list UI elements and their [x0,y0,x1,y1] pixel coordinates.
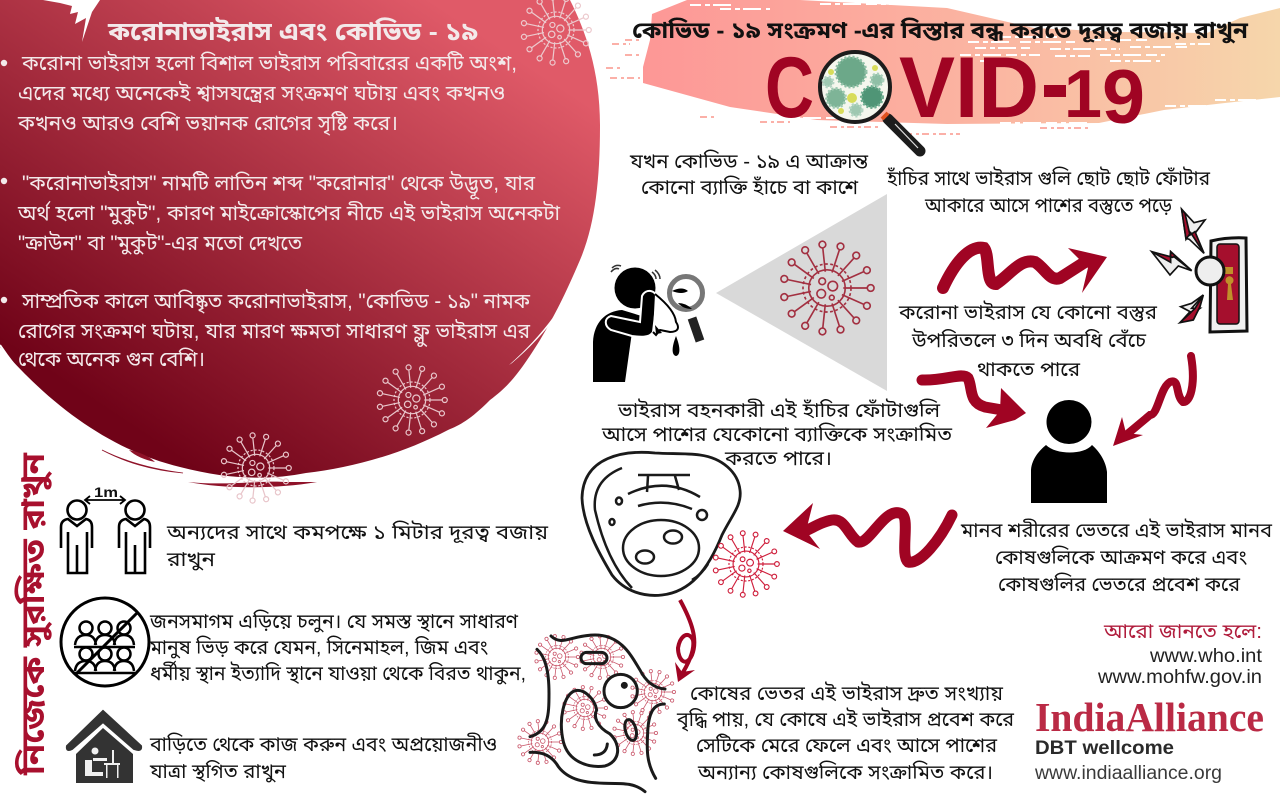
text: virus multiplies in cell: সেটিকে মেরে ফেলে এবং আসে পাশের [696,733,998,757]
icon: magnifier with green viruses [820,52,920,151]
icon: pale virus bottom [221,433,291,503]
title: COVID-19: 9 [1102,55,1145,140]
arrow: cell to damaged cell [675,600,695,682]
logo: India Alliance: IndiaAlliance [1035,694,1264,740]
text: when infected person sneezes: কোনো ব্যাক্তি হাঁচে বা কাশে [641,175,858,199]
bullet list: what coronavirus is [1,51,560,371]
icon: door handle and lightning [1152,209,1247,332]
text: keep 1 metre distance: রাখুন [166,549,216,571]
text: avoid crowds: মানুষ ভিড় করে যেমন, সিনেমাহল, জিম এবং [149,635,488,659]
title: COVID-19 [765,40,1145,140]
text: virus multiplies in cell: বৃদ্ধি পায়, যে কোষে এই ভাইরাস প্রবেশ করে [676,707,1015,732]
heading: maintain distance: কোভিড - ১৯ সংক্রমণ -এর বিস্তার বন্ধ করতে দূরত্ব বজায় রাখুন [632,16,1249,44]
icon: two people 1 metre apart [61,484,150,573]
text: avoid crowds: জনসমাগম এড়িয়ে চলুন। যে সমস্ত স্থানে সাধারণ [149,609,519,633]
text: virus multiplies in cell: অন্যান্য কোষগুলিকে সংক্রামিত করে। [697,760,993,784]
bullet list: what coronavirus is: অর্থ হলো "মুকুট", কারণ মাইক্রোস্কোপের নীচে এই ভাইরাস অনেকটা [17,200,560,225]
text: droplets infect nearby person [601,398,953,470]
panel: salmon brush header background [606,0,1280,134]
title: COVID-19: C [765,40,814,136]
text: virus enters cells [960,518,1273,596]
text: when infected person sneezes: যখন কোভিড - ১৯ এ আক্রান্ত [629,149,869,173]
vertical heading: keep yourself safe: নিজেকে সুরক্ষিত রাখুন [15,452,52,776]
arrow: sneeze to person [922,376,1026,428]
bullet list: what coronavirus is: "ক্রাউন" বা "মুকুট"-এর মতো দেখতে [18,231,303,255]
links: more information: www.mohfw.gov.in [1097,667,1262,688]
bullet list: what coronavirus is: এদের মধ্যে অনেকেই শ্বাসযন্ত্রের সংক্রমণ ঘটায় এবং কখনও [18,81,505,105]
panel: red brush circle about coronavirus [0,0,600,503]
text: avoid crowds [149,609,526,685]
text: virus survives on surface: থাকতে পারে [977,359,1081,381]
text: when infected person sneezes [629,149,869,199]
text: virus enters cells: মানব শরীরের ভেতরে এই ভাইরাস মানব [960,518,1273,542]
text: droplets infect nearby person: আসে পাশের যেকোনো ব্যাক্তিকে সংক্রামিত [601,422,953,446]
icon: human cell with virus [582,452,779,597]
icon: person sneezing with magnifier [593,265,702,382]
bullet list: what coronavirus is: থেকে অনেক গুন বেশি। [18,347,205,371]
icon: pale virus top [521,0,591,65]
icon: person silhouette [1031,400,1107,503]
text: virus multiplies in cell [676,681,1015,784]
text: virus survives on surface: উপরিতলে ৩ দিন অবধি বেঁচে [911,328,1146,352]
text: droplets fall on objects [886,166,1211,217]
text: stay home: যাত্রা স্থগিত রাখুন [149,759,287,783]
text: virus enters cells: কোষগুলির ভেতরে প্রবেশ করে [998,572,1241,596]
text: stay home [149,732,497,783]
text: keep 1 metre distance: অন্যদের সাথে কমপক্ষে ১ মিটার দূরত্ব বজায় [166,520,549,544]
icon: two people 1 metre apart: 1m [94,484,118,500]
text: virus multiplies in cell: কোষের ভেতর এই ভাইরাস দ্রুত সংখ্যায় [690,681,1003,705]
title: COVID-19: VID [899,40,1039,136]
title: COVID-19: 1 [1064,56,1102,132]
text: keep 1 metre distance [166,520,549,571]
icon: pale virus lower right [377,365,447,435]
links: more information [1097,621,1263,688]
arrow: person to cell [783,503,952,562]
panel heading: করোনাভাইরাস এবং কোভিড - ১৯ [107,17,478,46]
text: stay home: বাড়িতে থেকে কাজ করুন এবং অপ্রয়োজনীও [149,732,497,756]
text: virus survives on surface [898,300,1158,381]
bullet list: what coronavirus is: সাম্প্রতিক কালে আবিষ্কৃত করোনাভাইরাস, "কোভিড - ১৯" নামক [21,289,531,314]
text: avoid crowds: ধর্মীয় স্থান ইত্যাদি স্থানে যাওয়া থেকে বিরত থাকুন, [150,659,526,685]
icon: damaged cell with replicating viruses [518,634,676,792]
logo: India Alliance [1034,694,1264,784]
text: droplets fall on objects: আকারে আসে পাশের বস্তুতে পড়ে [924,195,1173,217]
text: droplets infect nearby person: ভাইরাস বহনকারী এই হাঁচির ফোঁটাগুলি [617,398,940,422]
arrow: droplets to surface [943,248,1107,293]
icon: work from home [67,711,141,783]
bullet list: what coronavirus is: "করোনাভাইরাস" নামটি লাতিন শব্দ "করোনার" থেকে উদ্ভূত, যার [22,171,535,201]
text: virus enters cells: কোষগুলিকে আক্রমণ করে এবং [995,545,1247,569]
grey sneeze cone with virus [716,194,887,391]
icon: no crowds [61,598,149,686]
arrow: surface to person [1113,356,1193,446]
bullet list: what coronavirus is: করোনা ভাইরাস হলো বিশাল ভাইরাস পরিবারের একটি অংশ, [21,51,517,75]
bullet list: what coronavirus is: কখনও আরও বেশি ভয়ানক রোগের সৃষ্টি করে। [17,111,398,136]
logo: India Alliance: www.indiaalliance.org [1034,763,1222,784]
logo: India Alliance: DBT wellcome [1035,738,1174,759]
links: more information: আরো জানতে হলে: [1103,621,1262,643]
bullet list: what coronavirus is: রোগের সংক্রমণ ঘটায়, যার মারণ ক্ষমতা সাধারণ ফ্লু ভাইরাস এর [18,319,530,349]
text: virus survives on surface: করোনা ভাইরাস যে কোনো বস্তুর [898,300,1158,324]
text: droplets fall on objects: হাঁচির সাথে ভাইরাস গুলি ছোট ছোট ফোঁটার [886,166,1211,190]
links: more information: www.who.int [1149,646,1263,667]
text: droplets infect nearby person: করতে পারে। [724,448,832,470]
